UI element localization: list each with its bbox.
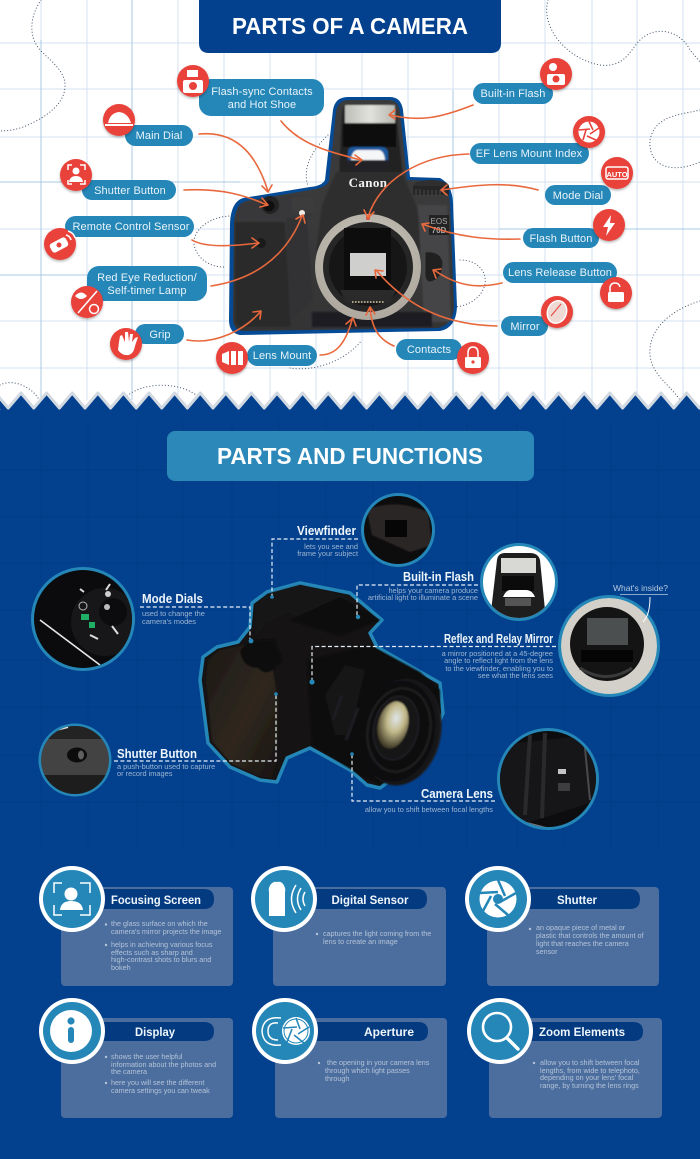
icon: aperture rings xyxy=(252,998,318,1064)
callout: lens mount xyxy=(216,342,317,374)
circle: mode dials xyxy=(30,565,139,673)
label: camera lens: Camera Lens xyxy=(421,787,493,801)
self-timer lamp xyxy=(292,197,314,216)
decorative dotted curves xyxy=(0,0,700,400)
icon: aperture xyxy=(573,116,605,148)
callout: grip: Grip xyxy=(149,329,171,341)
circle: viewfinder xyxy=(360,493,435,567)
label: mode dials: used to change the xyxy=(142,609,205,618)
panel: display xyxy=(39,998,233,1118)
panel: focusing screen xyxy=(39,866,233,986)
callout: built-in flash: Built-in Flash xyxy=(481,88,545,100)
callout: main dial xyxy=(103,104,193,146)
background: grid paper xyxy=(0,0,700,420)
icon: focus person xyxy=(60,159,92,191)
callout: mirror xyxy=(501,296,573,336)
circle: shutter button xyxy=(38,724,112,796)
bullet text: camera's mirror projects the image xyxy=(111,927,221,936)
icon: hand xyxy=(110,328,142,360)
bullet text: light that reaches the camera xyxy=(536,939,629,948)
blue zigzag section background xyxy=(0,393,700,1159)
panel: shutter: Shutter xyxy=(557,893,597,907)
icon: mirror xyxy=(541,296,573,328)
callout: red eye reduction xyxy=(71,266,207,318)
lens mount ring xyxy=(315,214,421,320)
callout: remote control sensor: Remote Control Sensor xyxy=(72,221,190,233)
bullet text: an opaque piece of metal or xyxy=(536,923,626,932)
panel: digital sensor xyxy=(251,866,446,986)
bullet text: range, by turning the lens rings xyxy=(540,1081,639,1090)
label: built-in flash: artificial light to illuminate a scene xyxy=(368,593,478,602)
callout: grip xyxy=(110,324,184,360)
label: built-in flash: helps your camera produce xyxy=(388,586,478,595)
title tab xyxy=(199,0,501,53)
bullet text: through which light passes xyxy=(325,1066,410,1075)
bullet text xyxy=(533,1058,640,1090)
panel: digital sensor: Digital Sensor xyxy=(332,893,409,907)
bullet text xyxy=(316,929,431,946)
bullet text: depending on your lens' focal xyxy=(540,1073,634,1082)
panel: shutter xyxy=(465,866,659,986)
callout: red eye reduction: Self-timer Lamp xyxy=(107,285,187,297)
callout: lens release button: Lens Release Button xyxy=(508,267,612,279)
bullet text: sensor xyxy=(536,947,558,956)
label: viewfinder: lets you see and xyxy=(304,542,358,551)
panel: zoom elements: Zoom Elements xyxy=(539,1025,625,1039)
label: shutter button: a push-button used to capture xyxy=(117,762,215,771)
bullet text: high-contrast shots to blurs and xyxy=(111,955,211,964)
icon: lock xyxy=(457,342,489,374)
callout: red eye reduction: Red Eye Reduction/ xyxy=(97,272,198,284)
icon: main dial xyxy=(103,104,135,136)
callout: shutter button xyxy=(60,159,176,200)
bullet text: here you will see the different xyxy=(111,1078,204,1087)
bullet text: the camera xyxy=(111,1067,147,1076)
panel: display: Display xyxy=(135,1025,175,1039)
bullet text: bokeh xyxy=(111,963,131,972)
callout: built-in flash xyxy=(473,58,572,104)
icon: aperture xyxy=(465,866,531,932)
callout: flash button xyxy=(523,209,625,248)
bullet text: the glass surface on which the xyxy=(111,919,208,928)
icon: lens xyxy=(216,342,248,374)
canon logo text: Canon xyxy=(349,175,388,190)
bullet text xyxy=(529,923,643,956)
label: reflex and relay mirror xyxy=(309,632,556,685)
callout: EF lens mount index: EF Lens Mount Index xyxy=(476,148,583,160)
icon: lightning xyxy=(593,209,625,241)
lens release button xyxy=(425,252,443,282)
panel: aperture: Aperture xyxy=(364,1025,414,1039)
label: viewfinder xyxy=(270,524,358,599)
label: viewfinder: Viewfinder xyxy=(297,524,356,538)
icon: flash camera xyxy=(540,58,572,90)
callout: mode dial xyxy=(545,157,633,205)
title text: PARTS OF A CAMERA xyxy=(232,13,468,39)
label: mode dials xyxy=(140,592,253,643)
panel: aperture xyxy=(252,998,447,1118)
camera photo, three-quarter view xyxy=(200,583,451,793)
icon: magnifier xyxy=(467,998,533,1064)
icon: open lock xyxy=(600,277,632,309)
bullet text: information about the photos and xyxy=(111,1060,216,1069)
label: shutter button: Shutter Button xyxy=(117,747,197,761)
bullet text: lens to create an image xyxy=(323,937,398,946)
callout: flash button: Flash Button xyxy=(530,233,592,245)
label: mode dials: camera's modes xyxy=(142,617,196,626)
callout: mirror: Mirror xyxy=(510,321,540,333)
note: what's inside: What's inside? xyxy=(613,583,668,593)
circle: mirror inside xyxy=(558,595,660,697)
note: what's inside xyxy=(613,583,668,622)
model badge xyxy=(429,215,449,235)
model badge: 70D xyxy=(432,226,447,235)
bullet text: effects such as sharp and xyxy=(111,948,193,957)
circle: built-in flash xyxy=(480,543,558,621)
callout: lens mount: Lens Mount xyxy=(253,350,311,362)
label: mode dials: Mode Dials xyxy=(142,592,203,606)
callout: remote control sensor xyxy=(44,216,194,260)
callout: flash-sync contacts and hot shoe xyxy=(177,65,324,116)
callout: shutter button: Shutter Button xyxy=(94,185,166,197)
mode dial wheel xyxy=(413,180,449,196)
icon: focus person xyxy=(39,866,105,932)
label: viewfinder: frame your subject xyxy=(297,549,358,558)
label: reflex and relay mirror: angle to reflect light from the lens xyxy=(444,656,553,665)
label: reflex and relay mirror: a mirror positioned at a 45-degree xyxy=(442,649,553,658)
icon: auto: AUTO xyxy=(606,170,628,179)
bullet text: allow you to shift between focal xyxy=(540,1058,640,1067)
bullet text: the opening in your camera lens xyxy=(327,1058,430,1067)
icon: sensor xyxy=(251,866,317,932)
label: shutter button: or record images xyxy=(117,769,173,778)
panel: focusing screen: Focusing Screen xyxy=(111,893,201,907)
callout: contacts: Contacts xyxy=(407,344,451,356)
label: shutter button xyxy=(114,692,278,778)
bullet text: lengths, from wide to telephoto, xyxy=(540,1066,640,1075)
bullet text: shows the user helpful xyxy=(111,1052,183,1061)
annotated camera photo, front view xyxy=(229,97,457,335)
callout: mode dial: Mode Dial xyxy=(553,190,603,202)
label: built-in flash: Built-in Flash xyxy=(403,570,474,584)
label: reflex and relay mirror: Reflex and Relay Mirror xyxy=(444,632,553,646)
panel: zoom elements xyxy=(467,998,662,1118)
callout: flash-sync contacts and hot shoe: Flash-sync Contacts xyxy=(211,86,313,98)
callout: flash-sync contacts and hot shoe: and Hot Shoe xyxy=(228,99,296,111)
bullet text xyxy=(318,1058,430,1083)
section heading: parts and functions xyxy=(167,431,534,481)
label: camera lens: allow you to shift between focal lengths xyxy=(365,805,493,814)
bullet text: through xyxy=(325,1074,349,1083)
circle: camera lens xyxy=(497,728,603,832)
section heading: parts and functions: PARTS AND FUNCTIONS xyxy=(217,443,483,469)
model badge: EOS xyxy=(431,217,447,226)
callout arrows xyxy=(184,105,538,355)
callout: EF lens mount index xyxy=(470,116,605,164)
icon: red eye xyxy=(71,286,103,318)
bullet text xyxy=(105,1052,216,1095)
label: built-in flash xyxy=(356,570,478,619)
icon: info xyxy=(39,998,105,1064)
bullet text: camera settings you can tweak xyxy=(111,1086,210,1095)
callout: lens release button xyxy=(503,262,632,309)
icon: remote xyxy=(44,228,76,260)
remote sensor dot xyxy=(256,238,266,248)
bullet text: captures the light coming from the xyxy=(323,929,431,938)
lens glass xyxy=(373,698,413,752)
label: camera lens xyxy=(350,752,495,814)
label: reflex and relay mirror: see what the lens sees xyxy=(478,671,553,680)
callout: contacts xyxy=(396,339,489,374)
shutter button xyxy=(261,196,279,214)
icon: hot shoe camera xyxy=(177,65,209,97)
label: reflex and relay mirror: to the viewfinder, enabling you to xyxy=(445,664,553,673)
bullet text: plastic that controls the amount of xyxy=(536,931,643,940)
bullet text: helps in achieving various focus xyxy=(111,940,213,949)
mirror xyxy=(350,253,386,276)
callout: main dial: Main Dial xyxy=(136,130,182,142)
bullet text xyxy=(105,919,221,972)
